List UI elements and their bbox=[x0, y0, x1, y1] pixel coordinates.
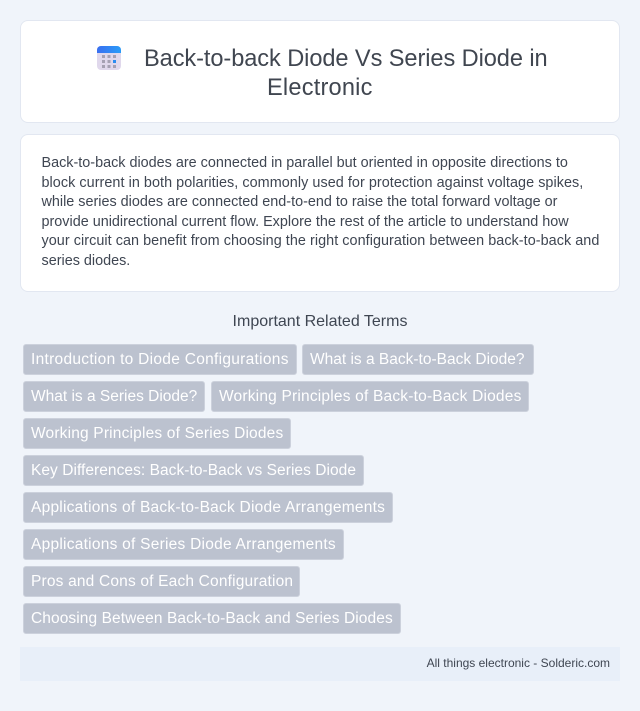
heading: important related terms: Important Related Terms bbox=[233, 313, 407, 330]
tag bbox=[302, 344, 534, 375]
tag: Key Differences: Back-to-Back vs Series Diode bbox=[31, 462, 356, 479]
text block: introduction: provide unidirectional current flow. Explore the rest of the article to understand how bbox=[42, 214, 569, 230]
tag: What is a Series Diode? bbox=[31, 388, 197, 405]
tag bbox=[23, 492, 393, 523]
tag bbox=[211, 381, 529, 412]
tag bbox=[23, 603, 401, 634]
footer bar bbox=[20, 647, 620, 681]
panel: related term tags bbox=[23, 344, 534, 634]
heading: title: Electronic bbox=[267, 75, 373, 101]
footer text: All things electronic - Solderic.com bbox=[427, 656, 610, 670]
text block: introduction: block current in both polarities, commonly used for protection against voltage spikes, bbox=[42, 175, 583, 191]
tag: Applications of Series Diode Arrangements bbox=[31, 536, 336, 553]
panel: intro text card bbox=[20, 134, 620, 292]
tag: Working Principles of Back-to-Back Diodes bbox=[219, 388, 522, 405]
tag: Introduction to Diode Configurations bbox=[31, 351, 289, 368]
text block: introduction: your circuit can benefit from choosing the right configuration between back-to-back and bbox=[42, 233, 599, 249]
tag: Pros and Cons of Each Configuration bbox=[31, 573, 293, 590]
icon: calendar grid bbox=[97, 46, 121, 70]
tag: Working Principles of Series Diodes bbox=[31, 425, 283, 442]
tag: Applications of Back-to-Back Diode Arrangements bbox=[31, 499, 385, 516]
panel: header card bbox=[20, 20, 620, 123]
text block: introduction: Back-to-back diodes are connected in parallel but oriented in opposite directions to bbox=[42, 155, 568, 171]
tag bbox=[23, 529, 344, 560]
text block: introduction bbox=[42, 155, 599, 269]
tag bbox=[23, 566, 300, 597]
text block: introduction: series diodes. bbox=[42, 253, 130, 269]
tag: What is a Back-to-Back Diode? bbox=[310, 351, 525, 368]
tag bbox=[23, 344, 297, 375]
tag bbox=[23, 381, 205, 412]
heading: title: Back-to-back Diode Vs Series Diode in bbox=[144, 46, 548, 72]
text block: introduction: while series diodes are connected end-to-end to raise the total forward voltage or bbox=[42, 194, 557, 210]
tag bbox=[23, 455, 364, 486]
tag bbox=[23, 418, 291, 449]
tag: Choosing Between Back-to-Back and Series Diodes bbox=[31, 610, 393, 627]
heading: title bbox=[144, 46, 548, 101]
